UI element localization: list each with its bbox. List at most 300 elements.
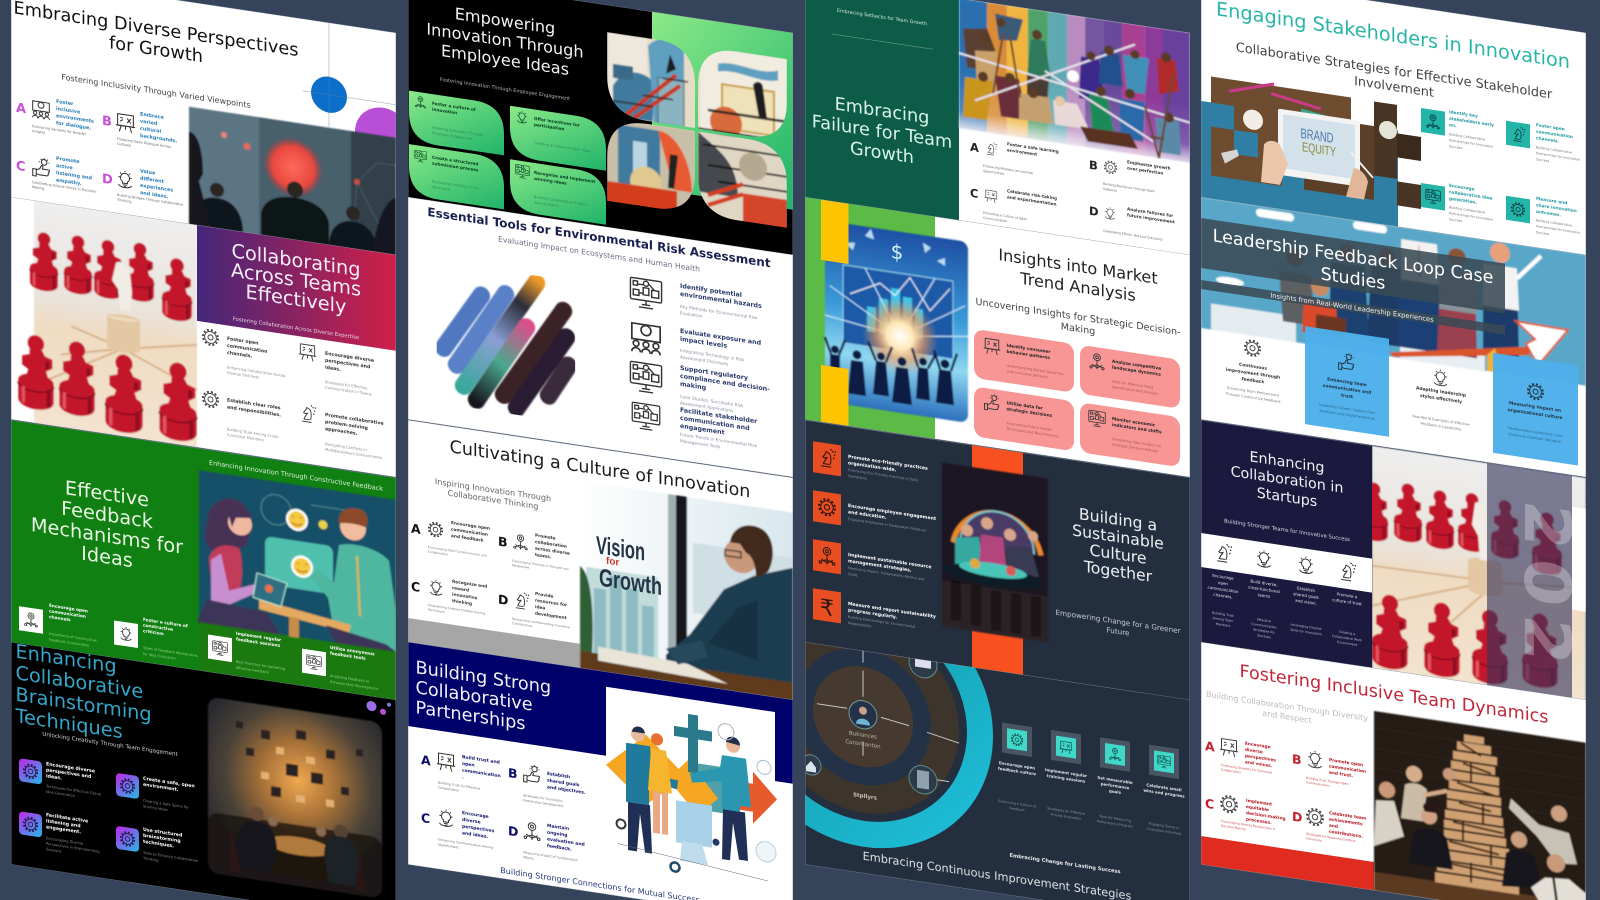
item A detail: Building Trust for Effective — [438, 781, 480, 791]
column 1 heading: channels. — [1213, 592, 1233, 600]
item 3 detail: Encouraging Diverse — [46, 836, 84, 846]
crowd of figures — [963, 9, 1181, 155]
column 2 heading: teams — [1258, 592, 1270, 599]
card 4 heading: Recognize and implement — [534, 170, 595, 184]
icon tile 4 — [116, 826, 139, 852]
tile 1 — [1002, 723, 1032, 757]
card 2 heading: Offer incentives for — [534, 116, 581, 128]
item 3 detail: Building Collaborative — [1449, 205, 1485, 215]
item C heading: Celebrate risk-taking — [1007, 188, 1057, 201]
item C detail: Promoting a Culture of Open — [983, 211, 1027, 221]
slide: Effective Feedback Mechanisms for Ideas — [11, 420, 396, 701]
diagram lower label: Stpllyrs — [853, 792, 878, 802]
green panel — [652, 12, 793, 210]
icon: bulb — [1434, 369, 1447, 386]
step 2 detail: Process Evaluation — [1051, 812, 1081, 821]
item 3 heading: listening and — [46, 818, 81, 829]
item A heading: inclusive — [56, 106, 81, 116]
icon: chess knight — [302, 404, 315, 423]
column 3 detail: Leveraging Diverse — [1291, 622, 1321, 631]
item D heading: feedback. — [547, 843, 572, 853]
item 1 heading: ideas. — [46, 773, 62, 782]
item A heading: Encourage — [1245, 741, 1271, 750]
item 2 detail: Building Collaborative — [1536, 145, 1572, 155]
yellow block bottom — [821, 365, 848, 427]
icon tile 2 — [116, 773, 139, 799]
item 2 detail: for Idea Evaluation — [143, 652, 176, 661]
card 3 detail: Techniques and Best Practices — [1006, 427, 1059, 439]
item A heading: communication — [451, 526, 488, 538]
item 1 heading: Promote eco-friendly practices — [848, 454, 928, 472]
icon: board — [1220, 738, 1238, 758]
diagram centre label: Bukiances — [849, 731, 877, 741]
item B heading: cultural — [140, 126, 162, 135]
card heading 2: communication and — [1323, 383, 1371, 396]
card 4 heading: Monitor economic — [1112, 416, 1156, 429]
card heading 1: Continuous — [1239, 362, 1267, 372]
item D detail: Recognizing and Rewarding Innovative — [512, 617, 570, 629]
column 3 of slides — [746, 0, 1190, 900]
title: Fostering Inclusive Team Dynamics — [1240, 662, 1548, 728]
item D heading: and — [1329, 823, 1338, 830]
item B heading: and objectives. — [547, 784, 586, 796]
column 1 heading: Encourage — [1212, 573, 1234, 581]
icon: target network — [524, 822, 540, 841]
item C heading: Promote — [56, 156, 80, 165]
card 4 detail: Solving Teams — [534, 200, 559, 208]
item 3 heading: collaborative idea — [1449, 189, 1492, 202]
item 4 heading: share innovation — [1536, 202, 1577, 214]
item C detail: Enhancing Communication Among — [438, 838, 493, 850]
item B heading: across diverse — [535, 546, 570, 557]
item C detail: Empowering Creative Problem-Solving — [428, 603, 485, 616]
item 1 detail: Building Collaborative — [1449, 132, 1485, 142]
item A detail: Opportunities — [983, 169, 1004, 176]
item C detail: Communication — [983, 216, 1007, 223]
item 2 detail: Types of Feedback Mechanisms — [142, 646, 198, 658]
item D detail: Building Bridges Through Collaborative — [117, 193, 183, 207]
item 2 detail: Creating a Safe Space for — [143, 799, 189, 810]
icon: monitor network — [630, 277, 662, 310]
icon: thumbs up — [33, 156, 49, 178]
item D heading: resources for — [535, 598, 568, 608]
step 1 heading: feedback culture — [998, 766, 1036, 776]
step 1 detail: Feedback — [1009, 806, 1025, 812]
item B heading: over perfection — [1127, 165, 1163, 176]
image: market chart with celebrating silhouettes — [825, 220, 968, 423]
subtitle: Making — [1061, 321, 1095, 338]
title: Building Strong — [416, 657, 551, 698]
item 4 detail: Analyzing Feedback to — [330, 674, 369, 684]
diagram centre label: Consritanton — [845, 739, 881, 750]
item 4 detail: Building Partnerships for Environmental — [848, 615, 915, 629]
subtitle: Inspiring Innovation Through — [435, 476, 551, 503]
item 2 heading: Create a safe, open — [143, 776, 195, 790]
item heading: Promote collaborative — [325, 412, 384, 427]
item 4 heading: Utilize anonymous — [330, 645, 375, 658]
item 4 heading: brainstorming — [143, 833, 181, 844]
item 1 detail: Operations — [848, 474, 867, 481]
card 3 detail: Workplace — [432, 185, 450, 192]
item B detail: Fostering Open Dialogue Across — [117, 137, 171, 149]
image text: for: for — [606, 556, 619, 569]
card 4 detail: Integrating Data Insights for — [1112, 437, 1162, 449]
card heading 3: styles effectively — [1420, 393, 1462, 405]
column 4 detail: Creating a — [1339, 630, 1355, 636]
decorative purple circle — [355, 108, 396, 163]
item 3 heading: Implement regular — [236, 631, 282, 644]
item D detail: Thinking — [116, 198, 132, 204]
subtitle: Evaluating Impact on Ecosystems and Human Health — [498, 235, 700, 274]
icon: board — [985, 190, 997, 203]
card detail 2: Leadership Growth: Lessons from — [1319, 403, 1376, 415]
letter A: A — [1205, 738, 1215, 755]
card 2 icon — [517, 110, 527, 124]
subtitle: Insights from Real-World Leadership Experiences — [1270, 291, 1434, 324]
item heading: Encourage diverse — [325, 351, 374, 364]
card 3 icon — [984, 393, 999, 412]
slide: Enhancing Collaboration in Startups — [1201, 420, 1586, 701]
item A heading: . — [462, 775, 464, 780]
subtitle: Uncovering Insights for Strategic Decision- — [975, 297, 1181, 338]
item 4 heading: Measure and — [1536, 196, 1567, 206]
item 4 detail: Management Tools — [680, 438, 721, 450]
item A heading: and feedback — [451, 533, 484, 544]
column 3 heading: Establish — [1297, 585, 1315, 593]
item B detail: Building Trust Through Open — [1306, 776, 1349, 786]
item D heading: future improvement — [1127, 212, 1175, 224]
title: Mechanisms for — [31, 513, 183, 559]
item D heading: development — [535, 611, 567, 621]
image: diagonal capsule chart photo — [443, 268, 569, 416]
icon: gear — [1528, 383, 1543, 400]
tile 3 — [1421, 183, 1445, 211]
letter B: B — [498, 534, 508, 550]
item 3 detail: Perspectives in Brainstorming — [46, 842, 100, 854]
icon: people at desk — [632, 323, 660, 355]
icon: knight — [987, 142, 997, 156]
icon: knight — [1341, 562, 1355, 581]
card 2 detail: Identification and Analysis — [1112, 385, 1158, 396]
item C heading: processes. — [1246, 816, 1272, 826]
item detail: Communication in Teams — [325, 386, 372, 397]
icon: rocket upright — [1257, 549, 1271, 568]
image: two colleagues discussing feedback — [197, 470, 396, 653]
item D heading: achievements — [1329, 816, 1363, 827]
icon: bulb chart — [1299, 556, 1313, 574]
item A heading: diverse — [1245, 747, 1263, 755]
item 3 heading: Facilitate active — [46, 812, 88, 825]
card 2 heading: landscape dynamics — [1112, 365, 1161, 378]
column 3 detail: Skills for Innovation — [1290, 628, 1322, 636]
step 1 heading: Encourage open — [999, 760, 1035, 771]
item 4 heading: techniques. — [143, 839, 174, 849]
letter C: C — [970, 186, 978, 201]
item 4 heading: feedback tools — [330, 651, 366, 662]
item C detail: Making — [32, 185, 44, 191]
tile 4 — [1506, 196, 1530, 223]
white side block — [1572, 507, 1586, 612]
feedback items row — [19, 598, 379, 691]
slide: Embracing Continuous Improvement Strategies — [746, 582, 1190, 900]
item B detail: Partnership Development — [523, 798, 564, 808]
title: Across Teams — [231, 259, 361, 301]
item A heading: environment — [1007, 147, 1037, 157]
step 3 heading: Set measurable — [1097, 775, 1133, 785]
slide: Building a Sustainable Culture Together — [805, 420, 1190, 701]
card 1 heading: Foster a culture of — [432, 101, 476, 112]
image panel — [606, 687, 775, 900]
item 3 detail: Measuring Impact: Sustainability Metrics and — [848, 566, 924, 581]
item B heading: Promote open — [1329, 757, 1363, 768]
icon: gear head — [203, 329, 218, 346]
illustration: people shaking hands — [606, 702, 777, 887]
image text: EQUITY: EQUITY — [1302, 139, 1336, 159]
item 4 heading: Measure and report sustainability — [848, 601, 936, 620]
title: Startups — [1257, 485, 1317, 510]
item 3 heading: management strategies. — [848, 558, 912, 574]
item B heading: Emphasize growth — [1127, 159, 1171, 171]
item 1 heading: on. — [1449, 123, 1457, 129]
item 4 detail: Thinking — [142, 856, 158, 863]
item 1 heading: environmental hazards — [680, 291, 762, 310]
letter D: D — [1292, 809, 1302, 825]
item detail: Multidisciplinary Environments — [325, 448, 382, 460]
item D heading: Analyze failures for — [1127, 206, 1174, 218]
item D heading: idea — [535, 604, 545, 612]
dollar symbol: $ — [891, 239, 903, 265]
item B heading: backgrounds. — [140, 133, 178, 145]
red footer band — [1201, 836, 1374, 891]
card 3 detail: Forecasting Future Trends: — [1006, 421, 1052, 432]
icon: gear — [1221, 795, 1237, 813]
item heading: approaches. — [325, 426, 358, 437]
slide: Engaging Stakeholders in Innovation — [1201, 0, 1586, 256]
icon tile 4 — [302, 649, 326, 676]
item B heading: Establish — [547, 771, 570, 780]
column 4 detail: Collaborative Work — [1332, 634, 1362, 642]
orange vertical bar — [972, 445, 1023, 676]
column 1 heading: communication — [1208, 585, 1239, 594]
decorative blue circle — [311, 76, 347, 113]
item 4 heading: communication and — [680, 415, 750, 432]
item D detail: Contributions — [512, 621, 533, 628]
card 2 detail: Tools for Effective Trend — [1111, 379, 1153, 390]
title: Ideas — [81, 542, 133, 572]
decorative dots — [366, 699, 391, 716]
image: red pawns with leader figure — [18, 198, 197, 448]
title: Studies — [1321, 265, 1385, 294]
left text panel — [1201, 420, 1372, 669]
item 1 detail: Idea Generation — [46, 790, 75, 798]
letter A: A — [421, 752, 431, 768]
item A heading: communication — [462, 768, 501, 779]
step 4 detail: Innovation Initiatives — [1147, 827, 1181, 836]
item C heading: empathy. — [56, 177, 82, 187]
item heading: and responsibilities. — [227, 404, 281, 419]
subtitle band — [1201, 280, 1505, 335]
title: Employee Ideas — [441, 41, 569, 79]
title: Insights into Market — [998, 245, 1158, 288]
item C heading: reward — [452, 585, 469, 594]
item D heading: Value — [140, 168, 156, 177]
card 3 heading: submission process — [432, 161, 479, 173]
card 3 heading: Create a structured — [432, 155, 478, 167]
item B detail: Perspective — [512, 563, 529, 570]
item C heading: listening and — [56, 170, 92, 182]
letter C: C — [411, 579, 420, 595]
column 2 heading: Build diverse, — [1250, 578, 1278, 587]
letter D: D — [1089, 204, 1099, 219]
icon: bulb — [430, 579, 442, 596]
bold tagline: Embracing Change for Lasting Success — [1009, 853, 1121, 875]
item 1 heading: stakeholders early — [1449, 116, 1494, 128]
title: for Growth — [109, 32, 203, 67]
item 4 detail: Building Collaborative — [1536, 218, 1572, 228]
letter B: B — [1089, 158, 1098, 173]
item 2 heading: Encourage employee engagement — [848, 503, 937, 522]
step 2 detail: Strategies for Effective — [1047, 806, 1085, 816]
item 2 heading: environment. — [143, 782, 179, 793]
item detail: Navigating Conflicts in — [325, 442, 367, 452]
title: Techniques — [15, 704, 123, 743]
slide: Embracing Diverse Perspectives for Growth — [11, 0, 411, 258]
item B heading: Promote — [535, 533, 556, 542]
rupee glyph: ₹ — [820, 594, 834, 622]
card 4 detail: Strategic Decision-Making — [1112, 443, 1157, 453]
letter C: C — [421, 810, 430, 826]
card 3 detail: Promoting Creativity in the — [432, 180, 479, 191]
item detail: Building Trust Among Cross- — [227, 427, 280, 439]
slide: Empowering Innovation Through Employee Ideas — [408, 0, 793, 255]
item B heading: varied — [140, 119, 158, 127]
card 1 heading: Identify consumer — [1006, 343, 1051, 355]
step 3 detail: Performance Progress — [1097, 819, 1133, 829]
slide: Leadership Feedback Loop Case Studies — [1201, 197, 1586, 477]
letter C: C — [16, 159, 26, 175]
item B detail: Communication — [1306, 780, 1330, 788]
card heading 3: Adapting leadership — [1416, 385, 1466, 399]
item C detail: Celebrating Unique Voices in Decision- — [32, 180, 98, 194]
tile 3 — [1100, 737, 1130, 772]
item B detail: Cultures — [117, 142, 131, 148]
item A heading: Encourage open — [451, 520, 490, 532]
icon: knight — [516, 592, 528, 610]
image: people at table under exploding paper — [208, 697, 382, 899]
card 3 — [409, 144, 504, 209]
column 4 of slides — [1201, 0, 1586, 900]
item C heading: innovative — [452, 592, 478, 601]
column 4 detail: Environment — [1337, 640, 1358, 647]
card detail 3: Real-World Examples of Effective — [1412, 414, 1470, 427]
circular diagram — [746, 582, 980, 851]
year numerals: 202 — [1509, 496, 1584, 679]
tile 2 — [1506, 121, 1530, 148]
icon: monitor with charts — [630, 361, 662, 394]
letter A: A — [411, 521, 421, 537]
item B heading: communication — [1329, 763, 1366, 775]
tile 1 — [1421, 108, 1445, 136]
image: quatrefoil architecture collage — [607, 30, 787, 229]
item heading: ideas. — [325, 365, 341, 373]
subtitle: Future — [1107, 625, 1130, 638]
column 1 of slides — [11, 0, 411, 900]
item heading: communication — [227, 343, 267, 355]
title: Enhancing — [1250, 449, 1324, 476]
card heading 1: feedback — [1242, 376, 1265, 386]
item 3 heading: Encourage — [1449, 183, 1475, 193]
item 1 detail: Evaluation — [680, 310, 703, 320]
item 1 heading: perspectives and — [46, 767, 91, 780]
title: Collaborative — [415, 677, 533, 716]
card 2 detail: Creating a Culture of Open Ideas — [534, 141, 591, 153]
item C detail: Techniques — [427, 607, 445, 614]
image: man looking through window at vision for growth — [580, 481, 793, 701]
title: Embracing — [835, 94, 929, 129]
title: Empowering — [455, 4, 555, 38]
subtitle: Fostering Collaboration Across Diverse Expertise — [233, 316, 359, 341]
image: business people facing red sphere — [189, 107, 396, 256]
letter D: D — [102, 172, 113, 188]
title: Collaborative — [15, 661, 143, 703]
icon: gear head — [1245, 340, 1260, 357]
card 1 detail: Fostering Innovation Through — [432, 126, 483, 137]
item 1 detail: Embracing Eco-Friendly Practices in Daily — [848, 468, 918, 482]
item 2 heading: Evaluate exposure and — [680, 328, 761, 347]
item 1 detail: Importance of Constructive — [49, 632, 97, 643]
item 4 heading: Facilitate stakeholder — [680, 407, 758, 426]
icon: tablet — [632, 402, 660, 431]
tile 1 — [813, 441, 841, 476]
step 1 detail: Embracing a Culture of — [998, 799, 1037, 809]
title: Failure for Team — [812, 111, 952, 153]
column 1 detail: Members — [1216, 622, 1231, 628]
card 1 detail: and Consumer Behavior — [1006, 369, 1049, 380]
item 3 detail: Sessions — [46, 847, 62, 854]
subtitle: Building Stronger Teams for Innovative Success — [1224, 518, 1350, 543]
card heading 2: Enhancing team — [1327, 376, 1367, 388]
icon tile 2 — [114, 620, 138, 648]
item 3 heading: compliance and decision- — [680, 373, 770, 393]
item C heading: thinking — [452, 598, 472, 607]
item A heading: Foster a safe learning — [1007, 141, 1059, 154]
item A heading: Foster — [56, 99, 74, 107]
small heading: Embracing Setbacks for Team Growth — [837, 8, 927, 27]
slide: Essential Tools for Environmental Risk Assessment — [408, 197, 793, 477]
letter D: D — [498, 592, 508, 608]
card heading 2: trust — [1341, 393, 1353, 400]
item D heading: Provide — [535, 591, 554, 600]
item 1 heading: Encourage open — [49, 603, 88, 615]
item 2 heading: impact levels — [680, 336, 727, 350]
item heading: Establish clear roles — [227, 397, 281, 411]
item 2 detail: Assessment Processes — [680, 354, 729, 368]
item B detail: Encouraging Diversity in Thought and — [512, 559, 569, 571]
card 1 icon — [415, 96, 426, 109]
column 2 detail: Startups — [1257, 633, 1271, 639]
item D detail: Celebrating Efforts, Not Just Outcomes — [1103, 229, 1163, 242]
item D heading: contributions. — [1329, 829, 1363, 840]
title: Growth — [850, 138, 914, 168]
icon: bulb — [1105, 207, 1115, 220]
image text: BRAND: BRAND — [1300, 125, 1334, 146]
blue card 1 — [1305, 326, 1389, 437]
letter A: A — [970, 140, 979, 155]
item 4 heading: engagement — [680, 423, 725, 436]
step 3 heading: performance — [1101, 781, 1130, 790]
card 3 icon — [415, 150, 426, 163]
icon: bulb — [1308, 750, 1322, 769]
